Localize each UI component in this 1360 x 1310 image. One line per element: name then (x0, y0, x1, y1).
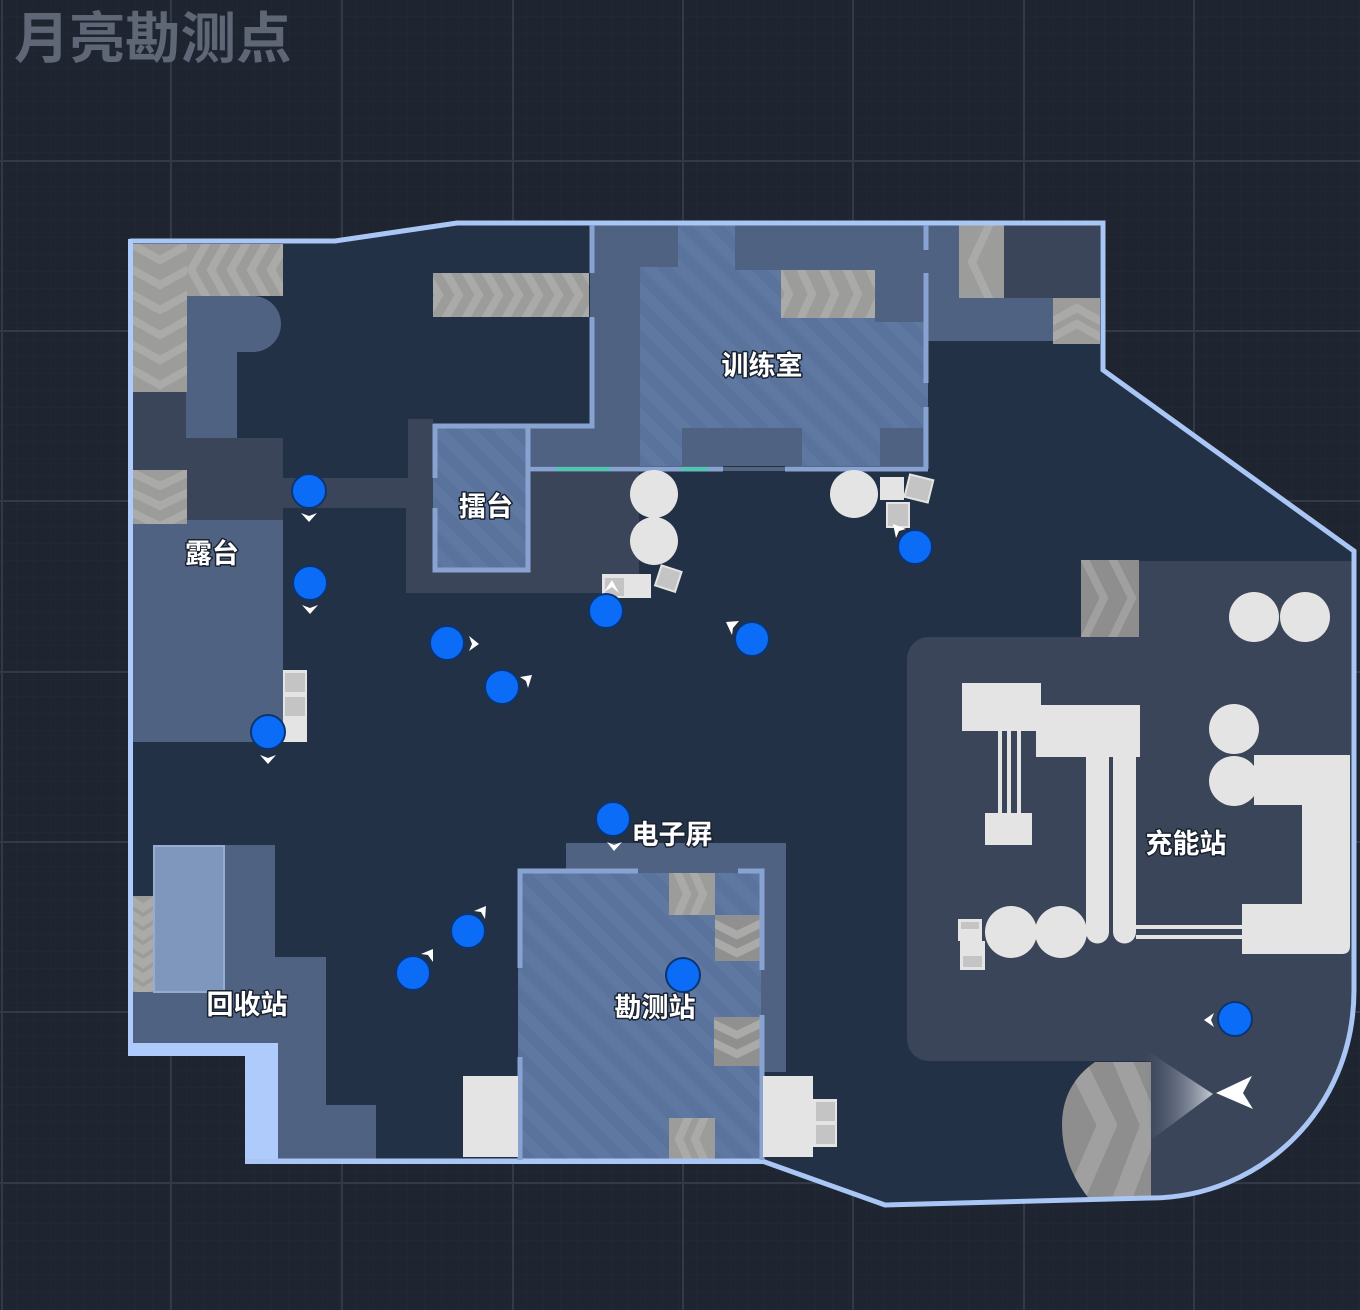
label: arena: 擂台 (459, 491, 513, 522)
label: recycling station: 回收站 (206, 990, 288, 1020)
point 7 (893, 524, 932, 564)
equipment: white furniture (283, 470, 1350, 1157)
hazard: upper right corner (1053, 298, 1100, 344)
hazard: survey right upper (715, 915, 760, 961)
zone: survey station surround (566, 843, 786, 1072)
zone: recycling station (133, 845, 376, 1159)
hazard: survey top (669, 873, 715, 915)
hazard: survey bottom (669, 1118, 715, 1158)
label: terrace: 露台 (185, 538, 239, 569)
zone: terrace (133, 520, 283, 742)
title: 月亮勘测点 (14, 8, 292, 70)
hazard: top left horizontal (187, 244, 283, 296)
zone: training room inner blocks (682, 428, 923, 466)
zone: recycling bay (154, 846, 224, 992)
hazard: terrace side (133, 470, 187, 524)
point 6 (726, 621, 769, 656)
zone: survey station (518, 873, 761, 1160)
point 3 (430, 626, 479, 660)
zone: arena room (433, 426, 528, 568)
zone: training room surround (528, 225, 928, 466)
hazard: upper right door (959, 226, 1004, 298)
label: charging station: 充能站 (1146, 829, 1226, 859)
hazard: charging bottom (1062, 1062, 1151, 1198)
floor (130, 223, 1354, 1205)
equipment: grey boxes (284, 474, 983, 1145)
hazard: recycling side (133, 896, 153, 992)
point 13 (1204, 1002, 1252, 1036)
hazard: training room (781, 270, 875, 318)
point 12 (666, 958, 700, 992)
point 4 (485, 670, 532, 704)
zone: upper right dark area (1004, 225, 1100, 298)
zone: training room (640, 225, 928, 466)
label: training room: 训练室 (722, 351, 802, 381)
point 8 (251, 715, 285, 764)
point 2 (293, 566, 327, 614)
point 11 (396, 949, 433, 990)
wall: bottom edge (245, 1159, 765, 1164)
label: survey station: 勘测站 (614, 993, 696, 1023)
door markers (556, 468, 708, 470)
zone: upper left walkway (186, 296, 281, 438)
point 1 (292, 474, 326, 522)
point 9 (596, 802, 630, 851)
label: screen: 电子屏 (632, 820, 712, 850)
point 10 (451, 906, 486, 948)
survey points (251, 474, 1252, 1036)
outer wall: lower left thick section (128, 239, 278, 1164)
floor plan (128, 221, 1360, 1210)
zone: charging station floor (907, 561, 1360, 1210)
hazard: upper corridor (433, 273, 589, 317)
zones clipped to floor (131, 221, 1360, 1210)
player arrow (1216, 1076, 1253, 1109)
view cone (1143, 1048, 1213, 1140)
labels (185, 351, 1226, 1023)
outer wall (130, 223, 1354, 1205)
point 5 (589, 580, 623, 628)
zone: upper left dark areas (133, 392, 639, 593)
hazard: survey right lower (714, 1017, 760, 1066)
zone: upper right medium area (928, 226, 1053, 341)
hazard: top left vertical (133, 244, 187, 392)
closed door (723, 467, 785, 471)
hazard: charging top (1081, 560, 1139, 637)
inner walls (433, 225, 928, 1160)
